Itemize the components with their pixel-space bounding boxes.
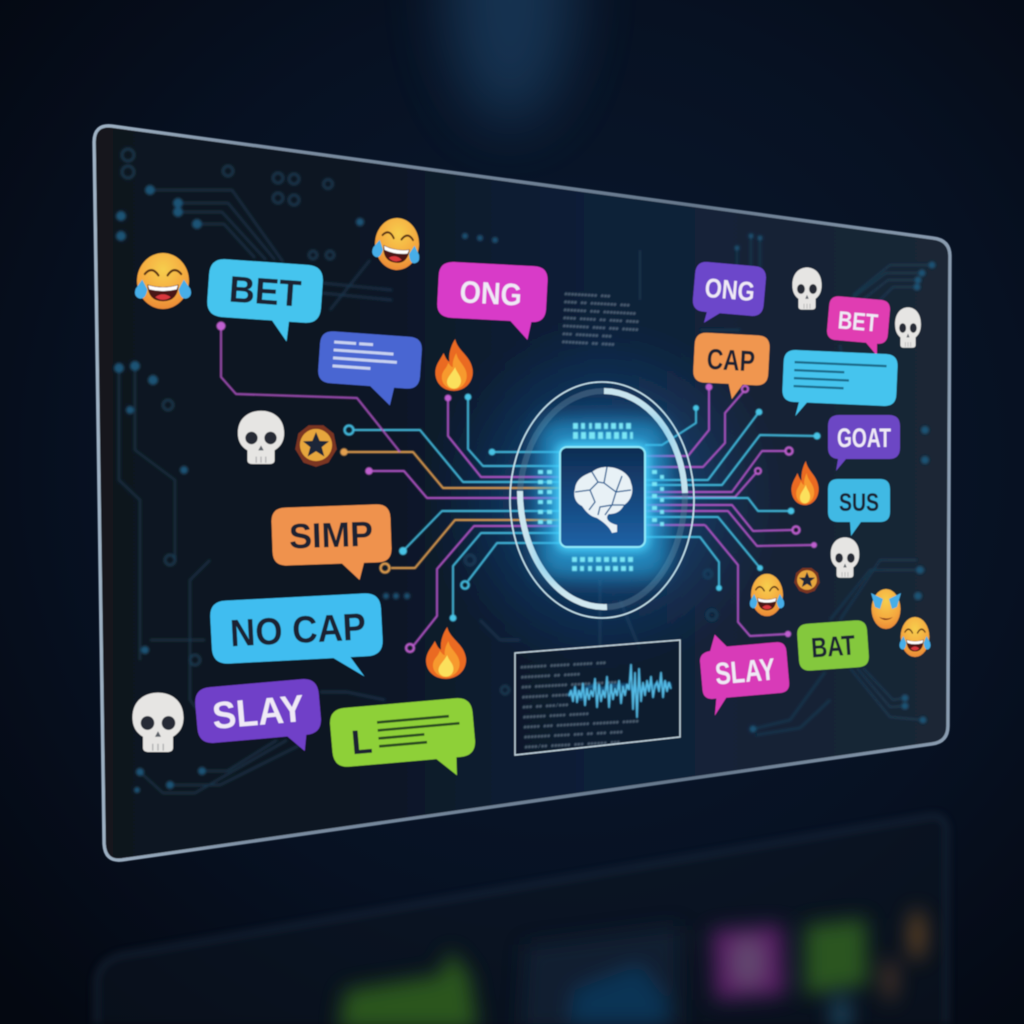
- bubble: SIMP: [271, 504, 393, 583]
- small text block: top centre: ####### ### ##########: [563, 307, 637, 317]
- bubble: ONG purple: ONG: [704, 273, 756, 307]
- icon: star-eyes emoji: [871, 589, 901, 629]
- readout text: ######## ########: [522, 691, 579, 701]
- message lines: [794, 361, 887, 391]
- small text block: top centre: [562, 291, 641, 350]
- background circuit traces: [114, 149, 936, 793]
- small text block: top centre: ######## ## ####: [562, 339, 615, 348]
- small text block: top centre: ######## #### ### #####: [562, 323, 639, 334]
- bubble: CAP: [692, 332, 770, 401]
- bubble: ONG pink: ONG: [459, 274, 523, 313]
- waveform: [569, 664, 671, 718]
- bubble: SLAY purple: [194, 678, 324, 760]
- bubble: GOAT: GOAT: [837, 423, 891, 453]
- readout text: ######### ## #####: [521, 671, 581, 681]
- icon: skull lower right: [831, 537, 859, 578]
- bubble: BAT: [796, 620, 870, 671]
- icon: laughing emoji right: [750, 574, 784, 616]
- icon: skull far right: [895, 307, 921, 348]
- icon: star badge right: [794, 568, 820, 593]
- icon: skull bottom left: [132, 693, 184, 752]
- chip pin grid: [538, 423, 664, 571]
- bubble: cyan message: [781, 350, 898, 420]
- icon: skull top right: [792, 267, 822, 310]
- message lines: [332, 340, 398, 372]
- icon: brain: [574, 467, 632, 533]
- icon: flame bottom: [426, 627, 466, 679]
- bubble: NO CAP: NO CAP: [229, 606, 367, 655]
- bubble: SLAY purple: SLAY: [211, 688, 306, 738]
- bubble: L message: L: [350, 723, 374, 762]
- readout text: ### ## ###/###: [522, 701, 569, 711]
- bubble: BET small pink: BET: [837, 306, 879, 338]
- waveform readout panel: [515, 640, 680, 755]
- message lines: [377, 714, 461, 748]
- bubble: BAT: BAT: [810, 629, 856, 663]
- icon: star badge left: [295, 425, 337, 467]
- small text block: top centre: #### ## ######## ###: [564, 299, 631, 309]
- bubble: blue message: [316, 331, 423, 407]
- chip with brain icon: [538, 420, 668, 578]
- ring gauge around chip: [510, 382, 694, 618]
- trace end nodes: left: [216, 322, 495, 652]
- bubble: SUS: SUS: [839, 489, 879, 517]
- floor reflection: [96, 816, 947, 1024]
- small text block: top centre: #### ##### ## #### ####: [563, 315, 640, 326]
- icon: flame right: [791, 461, 819, 505]
- trace end nodes: right: [693, 384, 821, 637]
- icon: laughing emoji far right: [899, 617, 931, 657]
- icon: skull large left: [238, 411, 284, 464]
- small text block: top centre: ########## ###: [564, 291, 611, 300]
- bubble: ONG purple: [691, 261, 767, 328]
- bubble: GOAT: [828, 415, 900, 471]
- panel glass edge: [94, 126, 950, 860]
- readout text: ######## ###### ###### ###: [520, 659, 607, 671]
- icon: laughing emoji top: [370, 214, 424, 274]
- bubble: SLAY pink: [698, 628, 791, 717]
- readout text: [520, 658, 641, 751]
- icon: laughing emoji large: [135, 253, 191, 309]
- readout text: ####### ##### ######: [523, 710, 590, 721]
- bubble: ONG pink: [436, 261, 548, 341]
- bubble: SIMP: SIMP: [288, 515, 374, 556]
- bubble: CAP: CAP: [706, 344, 756, 378]
- readout text: ##### ### ########## ######## #####: [523, 718, 640, 731]
- bubble: NO CAP: [209, 593, 384, 684]
- small text block: top centre: ### ####### ###: [562, 331, 613, 340]
- bubble: L message: [329, 697, 478, 786]
- bubble: SLAY pink: SLAY: [714, 651, 777, 692]
- data traces: left of chip: [216, 322, 560, 652]
- readout text: ### ########## ###### ### ###: [521, 679, 618, 691]
- bubble: BET: [205, 258, 324, 344]
- top light beam: [445, 0, 575, 125]
- central glow: [423, 312, 783, 682]
- bubble: BET: BET: [228, 269, 303, 314]
- readout text: ####/## ###### ### ###### ###: [524, 739, 621, 751]
- bubble: SUS: [828, 479, 890, 536]
- data traces: right of chip: [645, 384, 821, 637]
- panel: glass display: [94, 126, 950, 860]
- bubble: BET small pink: [825, 295, 891, 357]
- readout text: ######## ##### ### ## ### ####: [524, 729, 624, 741]
- icon: flame top: [435, 339, 473, 391]
